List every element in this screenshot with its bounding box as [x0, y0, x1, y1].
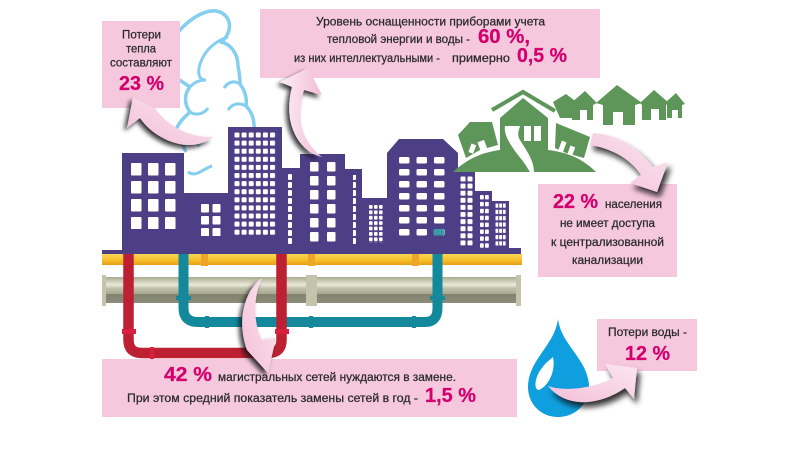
panel: sewerage access: не имеет доступа: [560, 218, 656, 230]
arrow: to sewerage access: [590, 133, 668, 192]
panel: heat losses: составляют: [110, 58, 173, 70]
buildings: [102, 127, 521, 254]
panel: metering level: Уровень оснащенности приборами учета: [316, 16, 546, 28]
panel: water losses: [597, 319, 697, 371]
panel: heat losses: тепла: [126, 44, 157, 56]
arrow: to water losses: [548, 364, 637, 402]
panel: sewerage access: [538, 184, 677, 277]
panel: water losses: Потери воды -: [608, 327, 687, 339]
arrow: to network replacement: [242, 278, 276, 373]
panel: network replacement: При этом средний показатель замены сетей в год -: [127, 393, 418, 405]
arrow: to metering level: [280, 68, 322, 157]
panel: metering level: примерно: [452, 53, 510, 65]
red pipe: [122, 254, 289, 359]
icon: houses: [453, 85, 685, 172]
teal pipe: [176, 254, 445, 328]
panel: metering level: 60 %,: [478, 26, 530, 48]
panel: metering level: тепловой энергии и воды -: [327, 34, 470, 46]
panel: metering level: 0,5 %: [517, 45, 567, 67]
panel: sewerage access: 22 %: [553, 191, 598, 213]
arrow: to heat losses: [127, 97, 213, 145]
panel: network replacement: 1,5 %: [425, 385, 476, 407]
panel: network replacement: 42 %: [164, 364, 212, 386]
panel: network replacement: магистральных сетей нуждаются в замене.: [218, 372, 456, 384]
panel: sewerage access: к централизованной: [551, 237, 664, 249]
steam cloud: [172, 11, 254, 174]
panel: heat losses: 23 %: [119, 73, 164, 95]
panel: metering level: из них интеллектуальными -: [294, 53, 440, 65]
panel: heat losses: Потери: [122, 30, 161, 42]
panel: sewerage access: населения: [605, 199, 662, 211]
panel: sewerage access: канализации: [572, 255, 643, 267]
panel: metering level: [260, 9, 600, 78]
panel: heat losses: [102, 21, 180, 108]
panel: water losses: 12 %: [625, 343, 670, 365]
yellow pipe: [102, 254, 522, 266]
panel: network replacement: [102, 359, 517, 417]
icon: water drop: [528, 319, 589, 417]
grey main pipe: [102, 275, 521, 306]
